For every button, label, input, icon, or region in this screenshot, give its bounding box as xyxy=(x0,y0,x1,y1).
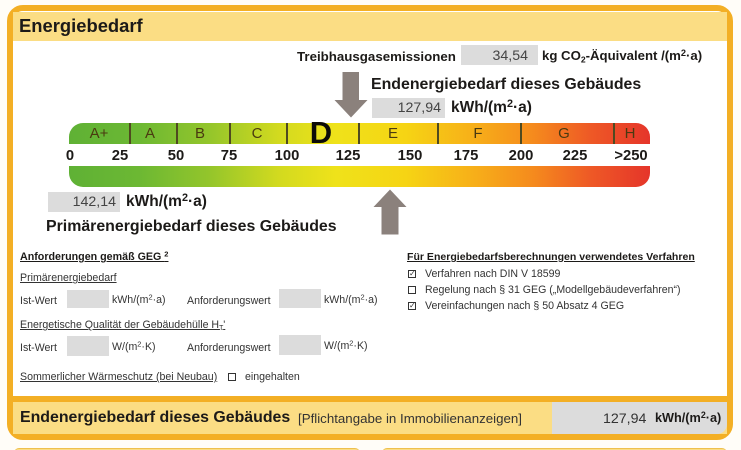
unit: W/(m2·K) xyxy=(324,339,368,352)
method heading: Für Energiebedarfsberechnungen verwendetes Verfahren xyxy=(407,251,695,263)
checkbox: eingehalten xyxy=(228,373,236,381)
label: Anforderungswert envelope: Anforderungswert xyxy=(187,342,271,354)
scale numbers: 0 xyxy=(66,148,74,164)
value box: 34,54 xyxy=(492,48,528,64)
subheading: Gebäudehülle: Energetische Qualität der Gebäudehülle HT' xyxy=(20,319,225,332)
label: Ist-Wert primary: Ist-Wert xyxy=(20,295,57,307)
scale numbers: 25 xyxy=(112,148,128,164)
class label C: C xyxy=(252,125,262,142)
option: § 31 GEG: Regelung nach § 31 GEG („Modellgebäudeverfahren“) xyxy=(425,284,681,296)
next panel edge right xyxy=(382,448,727,450)
heading: Endenergiebedarf dieses Gebäudes: Endenergiebedarf dieses Gebäudes xyxy=(371,76,641,93)
unit: kg CO2-Äquivalent /(m2·a) xyxy=(542,48,702,65)
input box xyxy=(279,335,321,355)
scale numbers: 100 xyxy=(275,148,299,164)
class label B: B xyxy=(195,125,205,142)
checkbox checked: ✓ xyxy=(409,269,416,278)
subheading: Primärenergiebedarf: Primärenergiebedarf xyxy=(20,272,117,284)
final energy value: 127,94 xyxy=(398,100,441,116)
value box xyxy=(461,45,538,65)
label: eingehalten: eingehalten xyxy=(245,371,300,383)
class label E: E xyxy=(388,125,398,142)
footer value: 127,94 xyxy=(603,411,646,427)
footer note: [Pflichtangabe in Immobilienanzeigen] xyxy=(298,411,522,426)
scale bar: top with classes xyxy=(69,123,650,144)
label: Treibhausgasemissionen: Treibhausgasemissionen xyxy=(297,49,456,64)
class label A: A xyxy=(145,125,155,142)
option: § 50: Vereinfachungen nach § 50 Absatz 4 GEG xyxy=(425,300,624,312)
greenhouse gas emissions row xyxy=(297,45,702,65)
checkbox empty xyxy=(408,286,416,294)
footer band xyxy=(13,396,727,434)
title: Energiebedarf xyxy=(19,15,143,36)
primary energy value xyxy=(48,192,120,212)
scale numbers: 175 xyxy=(454,148,478,164)
class label F: F xyxy=(473,125,483,142)
class label G: G xyxy=(558,125,570,142)
class label A+: A+ xyxy=(90,125,108,142)
scale numbers xyxy=(66,148,648,164)
scale numbers: >250 xyxy=(614,148,648,164)
scale numbers: 150 xyxy=(398,148,422,164)
footer unit: kWh/(m2·a) xyxy=(655,410,721,425)
unit: W/(m2·K) xyxy=(112,340,156,353)
arrow: final energy marker xyxy=(334,72,368,118)
primary energy value: 142,14 xyxy=(73,194,116,210)
class ticks xyxy=(129,123,615,144)
next panel edge left xyxy=(14,448,360,450)
heading: Primärenergiebedarf dieses Gebäudes: Primärenergiebedarf dieses Gebäudes xyxy=(46,218,337,235)
option: DIN V 18599: Verfahren nach DIN V 18599 xyxy=(425,268,560,280)
input box xyxy=(67,290,109,308)
panel: calculation method xyxy=(407,251,695,312)
input box xyxy=(279,289,321,308)
primary energy unit: kWh/(m2·a) xyxy=(126,192,207,210)
label: Anforderungswert primary: Anforderungswert xyxy=(187,295,271,307)
summer heat protection: Sommerlicher Wärmeschutz (bei Neubau) xyxy=(20,371,217,383)
scale bar: bottom xyxy=(69,166,650,187)
scale numbers: 50 xyxy=(168,148,184,164)
footer value box xyxy=(552,402,727,434)
scale numbers: 75 xyxy=(221,148,237,164)
scale numbers: 200 xyxy=(509,148,533,164)
arrow: primary energy marker xyxy=(374,190,406,234)
heading band xyxy=(13,12,727,41)
class label D (current): D xyxy=(310,115,332,150)
checkbox checked: ✓ xyxy=(409,301,416,310)
class label H: H xyxy=(625,125,635,142)
requirements heading: Anforderungen gemäß GEG 2 xyxy=(20,250,168,263)
panel: requirements xyxy=(20,250,378,383)
unit: kWh/(m2·a) xyxy=(324,293,378,306)
input box xyxy=(67,336,109,356)
unit: kWh/(m2·a) xyxy=(112,293,166,306)
final energy unit: kWh/(m2·a) xyxy=(451,98,532,116)
final energy value xyxy=(372,98,445,118)
scale numbers: 225 xyxy=(563,148,587,164)
label: Ist-Wert envelope: Ist-Wert xyxy=(20,342,57,354)
scale numbers: 125 xyxy=(336,148,360,164)
footer heading: Endenergiebedarf dieses Gebäudes xyxy=(20,409,290,426)
